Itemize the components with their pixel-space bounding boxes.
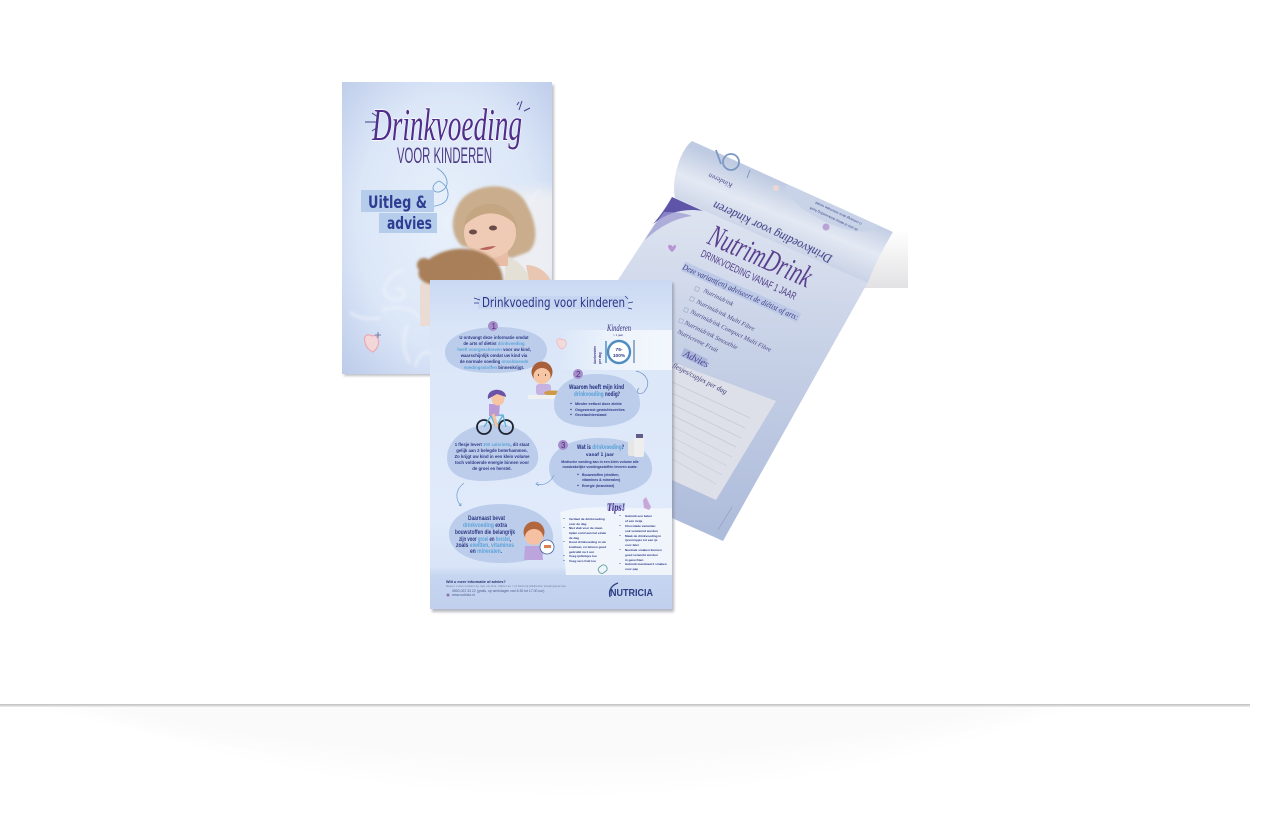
shirt — [536, 384, 551, 395]
contact icons — [446, 594, 450, 596]
purple swoosh — [653, 197, 703, 224]
age line: vanaf 1 jaar — [586, 452, 615, 457]
cover: Drinkvoeding voor kinderen — [342, 82, 560, 376]
tips right column: Chocolade varianten — [625, 524, 656, 528]
mouth — [479, 246, 496, 250]
label: Uitleg & — [368, 193, 427, 212]
reasons list — [570, 402, 625, 417]
hair — [524, 522, 544, 542]
intro text: voedingsstoffen binnenkrijgt. — [464, 365, 524, 370]
icon: sparkle — [375, 332, 381, 338]
bijdrage text: Zo krijgt uw kind in een klein volume — [455, 454, 530, 459]
option 3: Nutrinidrink Compact Multi Fibre — [688, 308, 772, 354]
intro text: waarschijnlijk omdat uw kind via — [460, 353, 528, 358]
fringe — [464, 204, 518, 228]
bijdrage text: de groei en herstel. — [472, 466, 512, 471]
strip — [361, 190, 434, 212]
kinderen plate — [593, 323, 634, 364]
daarnaast text: drinkvoeding extra — [463, 522, 507, 529]
contact line: Neemt u dan contact op met uw arts, diëtist en / of Nutricia Medische Voedingsservice — [446, 584, 567, 588]
roll blob — [786, 184, 878, 232]
voor kinderen: VOOR KINDEREN — [397, 143, 492, 168]
daarnaast text: bouwstoffen die belangrijk — [455, 529, 515, 536]
bijdrage text: gelijk aan 2 belegde boterhammen. — [456, 448, 528, 453]
advice line: Deze variant(en) adviseert de diëtist of arts: — [680, 262, 800, 322]
sheet body — [618, 197, 868, 541]
tips right column: Maak de drinkvoeding in — [625, 534, 661, 538]
panel: tips — [560, 497, 672, 575]
tips heading: Tips! — [607, 500, 625, 514]
tips left column: over de dag — [569, 522, 586, 526]
sparkle marks left — [365, 113, 378, 131]
blob — [554, 374, 640, 427]
teddy bear — [417, 249, 503, 284]
footer divider line — [0, 704, 1250, 707]
roll cast shadow — [862, 230, 908, 288]
kinderen band — [560, 330, 672, 370]
tips left column: tijden en/of aan het einde — [569, 531, 606, 535]
icon: heart badge — [364, 335, 379, 352]
sparkles — [474, 296, 633, 309]
swoosh tail — [645, 212, 692, 240]
arm — [420, 282, 430, 326]
step number: 1 — [492, 322, 496, 331]
caps — [636, 434, 643, 438]
icon: heart — [557, 339, 566, 349]
product checklist — [675, 287, 772, 354]
leg — [493, 414, 497, 427]
blob 3: wat is — [549, 438, 652, 495]
step number: 2 — [576, 370, 581, 379]
photo backdrop — [500, 188, 552, 280]
bear body — [418, 249, 503, 284]
website: www.nutricia.nl — [452, 593, 475, 597]
blob — [549, 438, 652, 495]
front wheel — [499, 420, 513, 434]
tips left column: Voeg vers fruit toe — [569, 559, 596, 563]
front sheet: Drinkvoeding voor kinderen — [430, 280, 674, 612]
divider dark edge — [0, 704, 1250, 706]
daarnaast text: en mineralen. — [470, 548, 502, 555]
label: advies — [387, 214, 432, 233]
option 4: Nutrinidrink Smoothie — [682, 319, 739, 351]
sheet title — [675, 217, 819, 354]
mirrored heading on roll: Drinkvoeding voor kinderen — [711, 198, 835, 266]
tips heading strip — [607, 503, 625, 510]
neck — [489, 251, 508, 266]
advies label — [671, 348, 729, 396]
heading strip — [478, 296, 628, 309]
tips right column — [620, 514, 667, 571]
tips right column: voor later — [625, 543, 640, 547]
step badge — [573, 369, 583, 379]
percentage 2: 100% — [613, 353, 626, 359]
icon: drink bottles — [628, 434, 644, 457]
face — [464, 213, 516, 258]
Advies: Advies — [681, 348, 711, 370]
tips right column: ijsvormpjes tot een ijs — [625, 538, 658, 542]
outer reflection — [60, 700, 1080, 790]
kinderen heading: Kinderen — [606, 323, 631, 333]
intro text: U ontvangt deze informatie omdat — [459, 335, 529, 340]
intro text: heeft voorgeschreven voor uw kind, — [457, 347, 531, 352]
swirl ornaments — [350, 284, 430, 366]
face — [525, 529, 543, 545]
flesjes line: flesjes/cupjes per dag — [671, 361, 729, 396]
hair — [453, 186, 535, 258]
tips right column: Neutrale smaken kunnen — [625, 548, 662, 552]
bijdrage text: 1 flesje levert 300 calorieën, dit staat — [455, 442, 530, 447]
knife — [633, 340, 635, 363]
tips left column: de dag — [569, 536, 579, 540]
blob 4: daarnaast — [449, 504, 553, 563]
icon: child on bicycle — [477, 390, 513, 434]
definition — [561, 460, 639, 488]
arrow curved down — [457, 483, 464, 506]
photo of girl with teddy — [350, 186, 560, 367]
tag: Uitleg & — [361, 190, 434, 212]
swirl arrow — [419, 168, 448, 207]
cover shadow — [344, 85, 554, 376]
rolled sheet: NutrimDrink advice page — [618, 141, 908, 541]
blob: bijdrage — [447, 424, 538, 481]
icon: toddler eating — [524, 522, 554, 560]
hair — [532, 362, 552, 382]
tag: advies — [379, 213, 437, 233]
definition: Bouwstoffen (eiwitten, — [582, 473, 619, 477]
tips right column: voor pap — [625, 567, 638, 571]
strip — [379, 213, 437, 233]
tips left column: Voeg ijsblokjes toe — [569, 554, 597, 558]
body — [524, 546, 543, 560]
mirrored blob text: U ontvangt deze informatie omdat — [815, 201, 862, 226]
footer contact — [446, 580, 567, 597]
logo: Nutricia — [609, 583, 653, 599]
tips left column: gebruikt na 1 uur — [569, 550, 595, 554]
tips right column: goed verwerkt worden — [625, 553, 658, 557]
step badge on roll — [822, 224, 830, 230]
notes box — [672, 362, 776, 500]
logo arc — [609, 583, 618, 597]
step badge — [558, 440, 568, 450]
sheet heading — [474, 295, 633, 311]
heading text: Drinkvoeding voor kinderen — [482, 295, 625, 311]
reasons list: Ongewenst gewichtsverlies — [575, 408, 625, 412]
helmet — [488, 390, 506, 399]
bijdrage text — [455, 442, 530, 471]
swirl arrow — [636, 371, 648, 394]
intro text: de normale voeding onvoldoende — [460, 359, 529, 364]
icon: plaster — [597, 564, 608, 575]
question line 2: drinkvoeding nodig? — [574, 391, 620, 398]
age: > 1 jaar — [613, 333, 623, 337]
logo wordmark: NUTRICIA — [610, 588, 653, 599]
face — [492, 392, 504, 406]
tips right column: Gebruik maximaal 2 smaken — [625, 562, 667, 566]
step badge — [488, 321, 498, 331]
option 2: Nutrinidrink Multi Fibre — [694, 298, 756, 333]
mirrored blob text 2: de arts of diëtist drinkvoeding heeft — [809, 206, 858, 232]
sparkle marks right — [517, 101, 530, 111]
blob — [447, 424, 538, 481]
tips background — [560, 507, 672, 575]
bowl — [540, 540, 554, 554]
plate of food — [544, 390, 562, 396]
intro text — [457, 335, 531, 370]
tips right column: Gebruik een beker — [625, 514, 653, 518]
tips right column: ook verwarmd worden — [625, 529, 658, 533]
peach dot — [773, 185, 779, 191]
definition: noodzakelijke voedingsstoffen leveren zoals: — [562, 465, 638, 469]
contact heading: Wilt u meer informatie of advies? — [446, 580, 506, 584]
tips right column: of een rietje — [625, 519, 643, 523]
phone: 0800-022 33 22 (gratis, op werkdagen van 8.30 tot 17.00 uur) — [452, 589, 544, 593]
mirrored kinderen label: Kinderen — [707, 171, 735, 190]
highlight strip — [681, 262, 801, 322]
shoulder — [526, 265, 550, 280]
fork — [605, 341, 607, 363]
step number: 3 — [561, 441, 566, 450]
small bottle — [628, 441, 635, 456]
plate icon upside down — [716, 150, 750, 178]
tips left column: koelkast, en binnen goed — [569, 545, 606, 549]
eyes — [538, 374, 546, 376]
tips left column: Niet vlak voor de maal- — [569, 526, 603, 530]
label strip — [681, 348, 708, 367]
daarnaast text: zoals eiwitten, vitamines — [456, 542, 514, 549]
sheet background — [430, 280, 672, 609]
frame — [484, 415, 506, 427]
food — [544, 545, 551, 548]
decorative heart — [668, 245, 676, 252]
blob 2: waarom — [554, 369, 640, 427]
icon: ice lolly — [643, 497, 651, 510]
tips right column: in gerechten — [625, 558, 644, 562]
arrows between steps — [536, 475, 554, 486]
table — [528, 395, 561, 399]
sheet shadow — [432, 283, 674, 612]
plate — [608, 341, 630, 363]
reasons list: Groeiachterstand — [575, 413, 607, 417]
checkboxes — [678, 286, 700, 324]
definition: Energie (brandstof) — [582, 484, 614, 488]
cover title — [365, 99, 530, 168]
option 5: Nutricreme Fruit — [675, 328, 719, 354]
question: Waarom heeft mijn kind — [569, 384, 624, 391]
question: Wat is drinkvoeding? — [577, 444, 624, 451]
back wheel — [477, 420, 491, 434]
eyes — [469, 230, 477, 234]
face — [534, 368, 550, 384]
cover background — [342, 82, 552, 374]
blob — [449, 504, 553, 563]
divider light edge — [0, 706, 1250, 707]
definition: Medische voeding kan in een klein volume alle — [561, 460, 639, 464]
tips left column: Houd drinkvoeding in uw — [569, 540, 607, 544]
notes box with lines — [672, 362, 776, 500]
rotated caption: Aanbevolen — [593, 346, 597, 364]
fine print edge — [718, 507, 732, 530]
soft floor shadow — [40, 700, 1080, 790]
subtitle: DRINKVOEDING VANAF 1 JAAR — [699, 248, 798, 303]
daarnaast text: zijn voor groei en herstel, — [459, 536, 511, 543]
blob 1: intro — [445, 321, 547, 373]
percentage: 75- — [616, 347, 623, 353]
inner reflection — [40, 700, 1060, 765]
bijdrage text: toch voldoende energie binnen voor — [455, 460, 529, 465]
intro text: de arts of diëtist drinkvoeding — [463, 341, 525, 346]
daarnaast text: Daarnaast bevat — [468, 515, 506, 522]
daarnaast text — [455, 515, 515, 555]
rotated caption 2: per dag — [598, 352, 602, 364]
large bottle — [634, 437, 644, 457]
blouse — [505, 258, 529, 280]
roll surface — [674, 141, 893, 283]
blob — [445, 327, 547, 373]
tips left column — [564, 517, 607, 563]
Drinkvoeding script: Drinkvoeding — [371, 99, 522, 150]
icon: boy at table — [528, 362, 562, 399]
reasons list: Minder eetlust door ziekte — [575, 402, 622, 406]
curled roll — [674, 141, 893, 283]
tips left column: Verdeel de drinkvoeding — [569, 517, 605, 521]
option 1: Nutrinidrink — [701, 287, 735, 308]
body — [489, 404, 500, 416]
NutrimDrink: NutrimDrink — [703, 217, 819, 294]
definition: vitamines & mineralen) — [582, 478, 620, 482]
